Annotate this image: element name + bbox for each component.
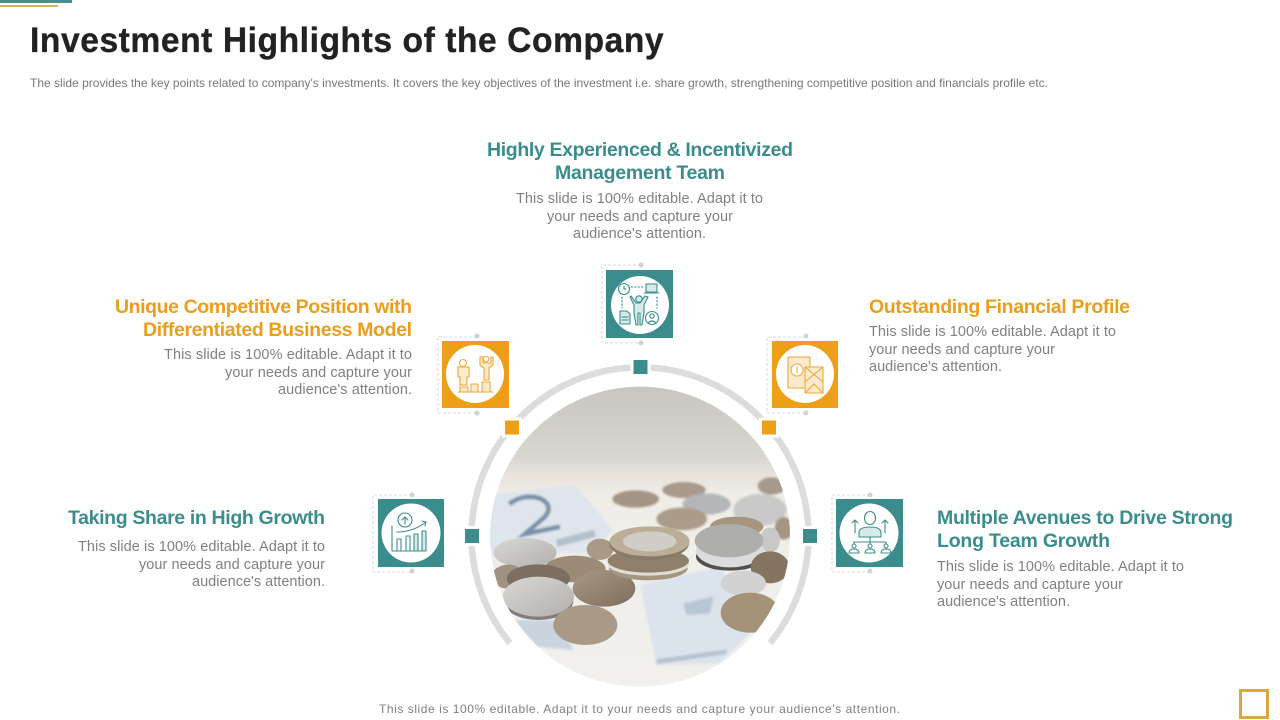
text block: multiple avenues: This slide is 100% editable. Adapt it to	[937, 559, 1184, 575]
top accent bars	[0, 0, 72, 7]
text block: management team: Management Team	[555, 162, 725, 184]
text block: management team: audience's attention.	[573, 226, 706, 242]
text block: multiple avenues	[937, 507, 1233, 610]
text block: financial profile: This slide is 100% editable. Adapt it to	[869, 324, 1116, 340]
node: lower left	[465, 529, 479, 543]
text block: management team: Highly Experienced & Incentivized	[487, 139, 793, 161]
node: upper left	[505, 420, 519, 434]
icon: financial profile	[767, 334, 838, 416]
text block: share growth: your needs and capture your	[139, 557, 325, 573]
footer note: This slide is 100% editable. Adapt it to your needs and capture your audience's attention.	[379, 702, 900, 716]
text block: multiple avenues: audience's attention.	[937, 594, 1070, 610]
text block: financial profile: audience's attention.	[869, 359, 1002, 375]
icon: competitive position	[438, 334, 509, 416]
text block: management team: your needs and capture your	[547, 209, 733, 225]
text block: share growth	[68, 507, 325, 590]
text block: competitive position: Differentiated Business Model	[143, 319, 412, 341]
title: Investment Highlights of the Company	[30, 21, 664, 60]
text block: competitive position: Unique Competitive Position with	[115, 296, 412, 318]
text block: financial profile: your needs and capture your	[869, 342, 1055, 358]
icon: share growth	[373, 492, 444, 574]
text block: competitive position: your needs and capture your	[225, 365, 412, 381]
text block: competitive position: This slide is 100% editable. Adapt it to	[164, 347, 412, 363]
text block: share growth: This slide is 100% editable. Adapt it to	[78, 539, 325, 555]
node: top	[634, 360, 648, 374]
icon: multiple avenues	[832, 492, 903, 574]
ring around photo	[472, 367, 808, 643]
text block: share growth: Taking Share in High Growth	[68, 507, 325, 529]
icon: management team	[602, 262, 673, 346]
text block: management team: This slide is 100% editable. Adapt it to	[516, 191, 763, 207]
text block: management team	[487, 139, 793, 242]
text block: competitive position: audience's attention.	[278, 382, 412, 398]
text block: competitive position	[115, 296, 412, 398]
text block: multiple avenues: your needs and capture your	[937, 577, 1123, 593]
photo: coins and banknotes	[490, 386, 790, 686]
text block: multiple avenues: Multiple Avenues to Drive Strong	[937, 507, 1233, 529]
text block: financial profile	[869, 296, 1130, 375]
text block: financial profile: Outstanding Financial Profile	[869, 296, 1130, 318]
node: upper right	[762, 420, 776, 434]
corner square	[1240, 690, 1268, 718]
node: lower right	[803, 529, 817, 543]
subtitle: The slide provides the key points related to company's investments. It covers the key objectives of the investment i.e. share growth, strengthening competitive position and financials profile etc.	[30, 76, 1048, 90]
text block: share growth: audience's attention.	[192, 574, 325, 590]
text block: multiple avenues: Long Team Growth	[937, 530, 1110, 552]
